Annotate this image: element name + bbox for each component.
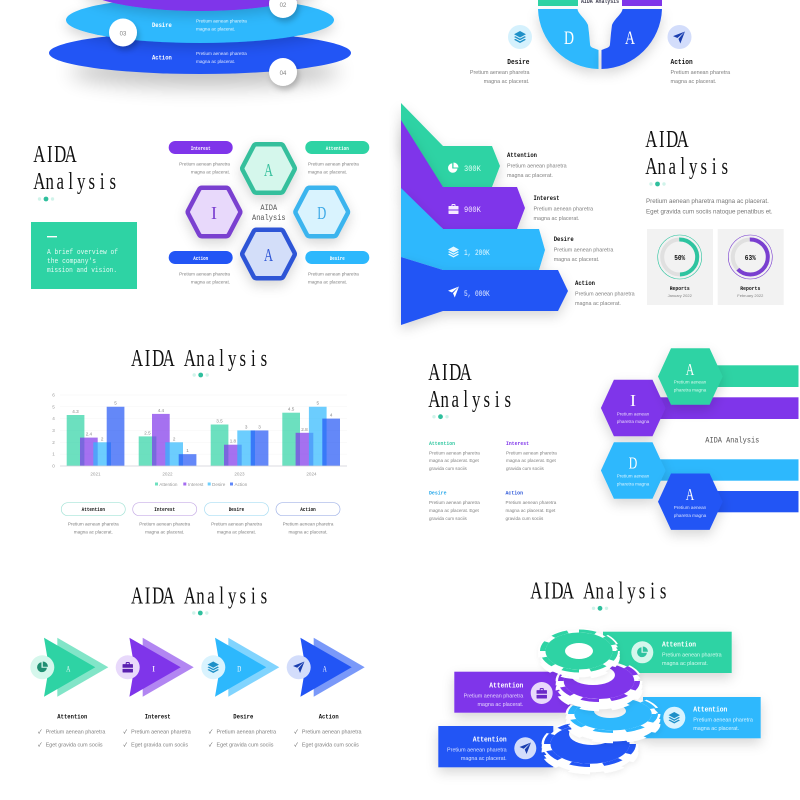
gear: action [544, 721, 636, 773]
ellipse: action [49, 32, 351, 74]
box: blue [438, 726, 553, 767]
arrow: action: A [323, 665, 327, 674]
label: interest: Interest [534, 195, 560, 202]
card: report 63% [718, 229, 784, 305]
pill: interest [133, 503, 197, 516]
text block: attention: magna ac placerat. Eget [429, 458, 480, 463]
hexagon: interest: I [211, 203, 217, 223]
text: interest body: magna ac placerat. [191, 170, 230, 174]
y axis labels: 5 [52, 404, 55, 409]
box: purple: Attention [489, 683, 524, 691]
pill: attention [305, 141, 369, 154]
panel: light bulb [470, 0, 730, 85]
text: desire body: magna ac placerat. [308, 280, 347, 284]
text: action body: magna ac placerat. [575, 301, 621, 307]
bars: 2022 [139, 414, 196, 466]
text: column bodies [68, 522, 334, 535]
pill: action [276, 503, 340, 516]
checklist: interest: ✓ [123, 728, 127, 735]
text: column bodies: magna ac placerat. [145, 530, 184, 535]
hexagon: attention [658, 348, 723, 405]
text: action body: Pretium aenean pharetra [196, 51, 247, 56]
box: light blue: Pretium aenean pharetra [693, 718, 753, 724]
value labels: 2 [101, 436, 104, 441]
text block: attention: Attention [429, 440, 455, 447]
text: action body: magna ac placerat. [670, 79, 716, 85]
hexagon: interest: pharetra magna [617, 419, 650, 424]
text: desire body: Pretium aenean pharetra [470, 70, 530, 76]
badge 03 [109, 18, 137, 46]
dots [432, 414, 449, 419]
value labels: 4.5 [288, 407, 295, 412]
labels [57, 713, 339, 720]
text block: interest: gravida cum sociis [506, 466, 544, 471]
text: column bodies: magna ac placerat. [74, 530, 113, 535]
hexagon: interest [601, 380, 666, 436]
y axis labels: 3 [52, 428, 55, 433]
checklist: desire: Eget gravida cum sociis [216, 742, 274, 748]
bars: 2024 [282, 407, 340, 466]
checklist: interest: Pretium aenean pharetra [131, 729, 191, 735]
checklist: action: ✓ [294, 728, 298, 735]
value labels: 2.8 [301, 427, 308, 432]
value 1,200K: 1, 200K [464, 248, 490, 258]
pill: desire [204, 503, 268, 516]
dots [192, 611, 208, 615]
dots [592, 606, 608, 611]
heading [33, 142, 116, 195]
text: action body: magna ac placerat. [196, 59, 235, 64]
value labels: 1.8 [230, 439, 237, 444]
pill: attention [61, 503, 125, 516]
legend: Attention [159, 482, 178, 487]
y axis labels: 0 [52, 464, 55, 469]
checklist: attention [38, 728, 105, 748]
value labels: 1 [186, 448, 189, 453]
icon: plane [448, 286, 459, 298]
text: action body: Pretium aenean pharetra [670, 70, 730, 76]
checklist: interest: Eget gravida cum sociis [131, 742, 188, 748]
pill: desire: Desire [330, 256, 345, 262]
heading: Analysis [645, 154, 728, 180]
pill: desire [305, 251, 369, 264]
value labels: 4.4 [158, 408, 165, 413]
label: desire: Desire [554, 236, 574, 243]
arrow: interest [116, 638, 194, 697]
text: action body: Pretium aenean pharetra [575, 292, 635, 298]
text block: attention: Pretium aenean pharetra [429, 450, 480, 455]
text block: action: magna ac placerat. Eget [506, 508, 556, 513]
pill: attention: Attention [326, 146, 349, 152]
heading: Analysis [428, 387, 511, 413]
text: column bodies: Pretium aenean pharetra [139, 522, 191, 527]
shadow under ellipses [70, 57, 340, 87]
panel: hexagon bars [428, 348, 798, 530]
labels: Interest [145, 713, 171, 720]
y axis labels: 1 [52, 452, 55, 457]
hexagon: desire: D [629, 453, 637, 472]
arrow: action [287, 638, 365, 697]
text block: attention: gravida cum sociis [429, 466, 467, 471]
y axis labels: 6 [52, 392, 55, 398]
hexagon: attention: pharetra magna [674, 388, 707, 393]
text block: action: Pretium aenean pharetra [506, 500, 557, 505]
text: desire body: magna ac placerat. [196, 26, 235, 32]
checklist: action: Pretium aenean pharetra [302, 729, 362, 735]
checklist: desire: ✓ [209, 741, 213, 748]
box: green: Pretium aenean pharetra [662, 653, 722, 659]
bar: interest [650, 397, 798, 419]
callout box [31, 222, 137, 289]
bulb segment: action [602, 9, 662, 69]
labels: Attention [57, 713, 87, 720]
box: blue: Pretium aenean pharetra [447, 748, 507, 754]
value 5,000K: 5, 000K [464, 289, 490, 299]
callout box: A brief overview of [47, 249, 118, 257]
text: interest body: Pretium aenean pharetra [179, 162, 230, 167]
icon: layers [508, 25, 532, 49]
box: purple: magna ac placerat. [477, 702, 523, 708]
ellipse: interest [82, 0, 318, 11]
bars: 2023 [211, 424, 268, 466]
checklist: action: ✓ [294, 741, 298, 748]
box: green: magna ac placerat. [662, 661, 708, 667]
value 900K: 900K [464, 205, 482, 215]
pill: interest: Interest [154, 507, 175, 513]
legend: Action [234, 482, 248, 487]
value labels: 4.3 [72, 409, 79, 414]
checklist: attention: ✓ [38, 741, 42, 748]
text: column bodies: magna ac placerat. [288, 530, 328, 535]
label: desire: Desire [507, 59, 530, 67]
bar: action [710, 491, 798, 512]
text: column bodies: magna ac placerat. [217, 530, 256, 535]
arrow: desire [201, 638, 279, 697]
value labels: 2.4 [86, 432, 93, 437]
icon: plane [668, 25, 692, 49]
text: action body: magna ac placerat. [191, 280, 230, 284]
badge 04: 04 [280, 71, 287, 77]
hexagon: action: A [264, 245, 273, 265]
card: report 50%: 50% [674, 255, 686, 263]
heading [428, 360, 511, 413]
hexagon: desire: pharetra magna [617, 482, 650, 487]
ribbon: interest [401, 120, 525, 229]
text: desire body: magna ac placerat. [484, 79, 530, 85]
text: interest body: magna ac placerat. [534, 216, 579, 222]
text block: action [506, 490, 557, 521]
arrow: desire: D [237, 665, 241, 674]
value labels: 3 [245, 424, 248, 429]
box: green: Attention [662, 642, 696, 650]
box: light blue [643, 697, 761, 738]
badge 02 [269, 0, 297, 18]
pill: action: Action [193, 256, 208, 262]
legend [155, 482, 248, 487]
panel: bar chart slide [52, 346, 347, 535]
checklist: desire: ✓ [209, 728, 213, 735]
checklist: attention: Eget gravida cum sociis [46, 742, 103, 748]
dots [38, 197, 54, 201]
panel: gears [438, 579, 761, 773]
text block: desire: gravida cum sociis [429, 516, 467, 521]
heading: AIDA Analysis [131, 346, 267, 372]
hexagon: desire: Pretium aenean [617, 474, 650, 479]
hexagon: interest [191, 191, 237, 233]
text block: interest: magna ac placerat. Eget [506, 458, 557, 463]
text: column bodies: Pretium aenean pharetra [283, 522, 334, 527]
text block: desire [429, 490, 480, 521]
gear: desire [568, 695, 658, 742]
badge 03: 03 [120, 32, 127, 38]
text: column bodies: Pretium aenean pharetra [68, 522, 119, 527]
arrow: interest: I [152, 665, 156, 674]
paragraph: Eget gravida cum sociis natoque penatibus et. [646, 208, 773, 216]
hexagon: action [246, 233, 292, 275]
hexagon: attention: Pretium aenean [674, 380, 707, 385]
card: report 63%: February 2022 [737, 293, 764, 298]
box: blue: Attention [473, 737, 507, 745]
labels: Desire [233, 713, 253, 720]
text block: interest [506, 440, 557, 471]
text: desire body: Pretium aenean pharetra [554, 248, 613, 254]
hexagon: action: Pretium aenean [674, 505, 707, 510]
text: action body: Pretium aenean pharetra [179, 272, 230, 277]
label: attention: Attention [507, 152, 537, 159]
checklist: action [294, 728, 362, 748]
box: purple [454, 672, 570, 713]
box: light blue: magna ac placerat. [693, 726, 739, 732]
checklist: interest: ✓ [123, 741, 127, 748]
pill: interest [169, 141, 233, 154]
bar: attention [710, 365, 798, 387]
card: report 63%: Reports [740, 285, 761, 292]
heading: AIDA Analysis [131, 584, 267, 609]
x axis labels: 2021 [90, 472, 101, 476]
dots [649, 182, 666, 186]
value labels: 5 [114, 401, 117, 406]
text block: attention [429, 440, 480, 471]
text block: action: Action [506, 490, 523, 497]
callout box: the company's [47, 258, 96, 266]
hexagon: desire [299, 191, 345, 233]
value labels: 2.5 [144, 430, 151, 435]
legend: Desire [212, 482, 226, 487]
text: desire body: Pretium aenean pharetra [196, 18, 247, 24]
ribbon: attention [401, 103, 500, 187]
checklist: interest [123, 728, 191, 748]
text: attention body: Pretium aenean pharetra [507, 164, 567, 170]
value labels: 4 [330, 413, 333, 418]
checklist: attention: ✓ [38, 728, 42, 735]
label: action: Action [670, 59, 693, 67]
ribbon: desire [401, 188, 545, 270]
gear: interest [558, 660, 640, 710]
value labels: 3.5 [216, 418, 223, 424]
letter A: A [625, 28, 635, 49]
label: desire: Desire [152, 22, 172, 29]
text: attention body: Pretium aenean pharetra [308, 162, 359, 167]
text: interest body: Pretium aenean pharetra [534, 206, 593, 212]
x axis labels: 2022 [162, 472, 173, 476]
card: report 63%: 63% [745, 255, 756, 263]
x axis labels: 2023 [234, 472, 245, 476]
checklist: desire [209, 728, 276, 748]
heading: Analysis [33, 169, 116, 195]
pill: attention: Attention [82, 507, 105, 513]
pill: desire: Desire [229, 507, 244, 513]
panel: arrows [30, 584, 365, 748]
label: action: Action [152, 54, 172, 62]
icon: layers [448, 246, 459, 258]
heading [645, 127, 728, 180]
y axis labels: 2 [52, 440, 55, 445]
panel: layered ellipses [49, 0, 351, 87]
hexagon: desire: D [317, 203, 326, 223]
hexagon: attention [246, 148, 292, 190]
text block: interest: Interest [506, 440, 529, 447]
pill: action [169, 251, 233, 264]
icon: pie [448, 162, 458, 173]
legend: Interest [188, 482, 204, 487]
checklist: desire: Pretium aenean pharetra [216, 729, 276, 735]
icon: briefcase [448, 204, 458, 214]
value labels: 3 [258, 424, 261, 429]
heading: AIDA [428, 360, 472, 386]
box: blue: magna ac placerat. [461, 756, 507, 762]
arrow: attention [30, 638, 108, 697]
checklist: attention: Pretium aenean pharetra [46, 729, 105, 735]
bar chart [52, 392, 347, 487]
value labels: 5 [317, 401, 320, 406]
card: report 50%: Reports [670, 285, 690, 292]
box: green [603, 632, 732, 673]
bulb segment: desire [538, 9, 598, 69]
hexagon: interest: Pretium aenean [617, 411, 650, 416]
badge 02: 02 [280, 3, 287, 9]
text: desire body: magna ac placerat. [554, 257, 600, 263]
value labels: 2 [173, 436, 176, 441]
checklist: action: Eget gravida cum sociis [302, 742, 359, 748]
letter D: D [564, 28, 574, 49]
bulb top segments [538, 0, 662, 6]
center label: AIDA [260, 203, 278, 213]
pill: interest: Interest [191, 146, 211, 152]
arrow: attention: A [66, 665, 70, 674]
hexagon: interest: I [630, 391, 636, 410]
box: purple: Pretium aenean pharetra [464, 694, 523, 700]
text: column bodies: Pretium aenean pharetra [211, 522, 262, 527]
center label: AIDA Analysis [705, 436, 759, 446]
box: light blue: Attention [693, 707, 728, 715]
ellipse: desire [66, 0, 334, 43]
panel: funnel ribbons [401, 103, 784, 325]
heading: AIDA Analysis [530, 579, 666, 604]
heading: AIDA [645, 127, 689, 153]
hexagon: action [658, 474, 723, 530]
hexagon: attention: A [264, 160, 273, 180]
x axis labels: 2024 [306, 472, 317, 476]
value labels [72, 401, 333, 453]
card: report 50% [647, 229, 713, 305]
text block: desire: magna ac placerat. Eget [429, 508, 480, 513]
hexagon: desire [601, 442, 666, 499]
dots [192, 373, 209, 377]
text: desire body: Pretium aenean pharetra [308, 272, 359, 277]
text block: action: gravida cum sociis [506, 516, 544, 521]
badge 04 [269, 58, 297, 86]
gear: attention [540, 629, 618, 678]
center label: Analysis [252, 213, 286, 223]
hexagon: action: A [686, 485, 695, 504]
label: action: Action [575, 280, 595, 287]
text: attention body: magna ac placerat. [308, 170, 347, 174]
callout box: mission and vision. [47, 267, 117, 275]
bars: 2021 [67, 407, 124, 466]
ribbon: action [401, 257, 568, 325]
bar: desire [650, 459, 798, 481]
y axis labels: 4 [52, 416, 55, 421]
value 300K: 300K [464, 164, 482, 174]
heading: AIDA [33, 142, 77, 168]
labels: Action [319, 713, 339, 720]
text block: interest: Pretium aenean pharetra [506, 450, 557, 455]
text block: desire: Pretium aenean pharetra [429, 500, 480, 505]
hexagon: attention: A [686, 360, 695, 379]
panel: hexagon overview [31, 141, 369, 289]
paragraph: Pretium aenean pharetra magna ac placerat. [646, 198, 769, 205]
pill: action: Action [300, 507, 316, 513]
card: report 50%: January 2022 [668, 293, 693, 298]
hexagon: action: pharetra magna [674, 513, 707, 518]
text: attention body: magna ac placerat. [507, 173, 553, 179]
text block: desire: Desire [429, 490, 447, 497]
